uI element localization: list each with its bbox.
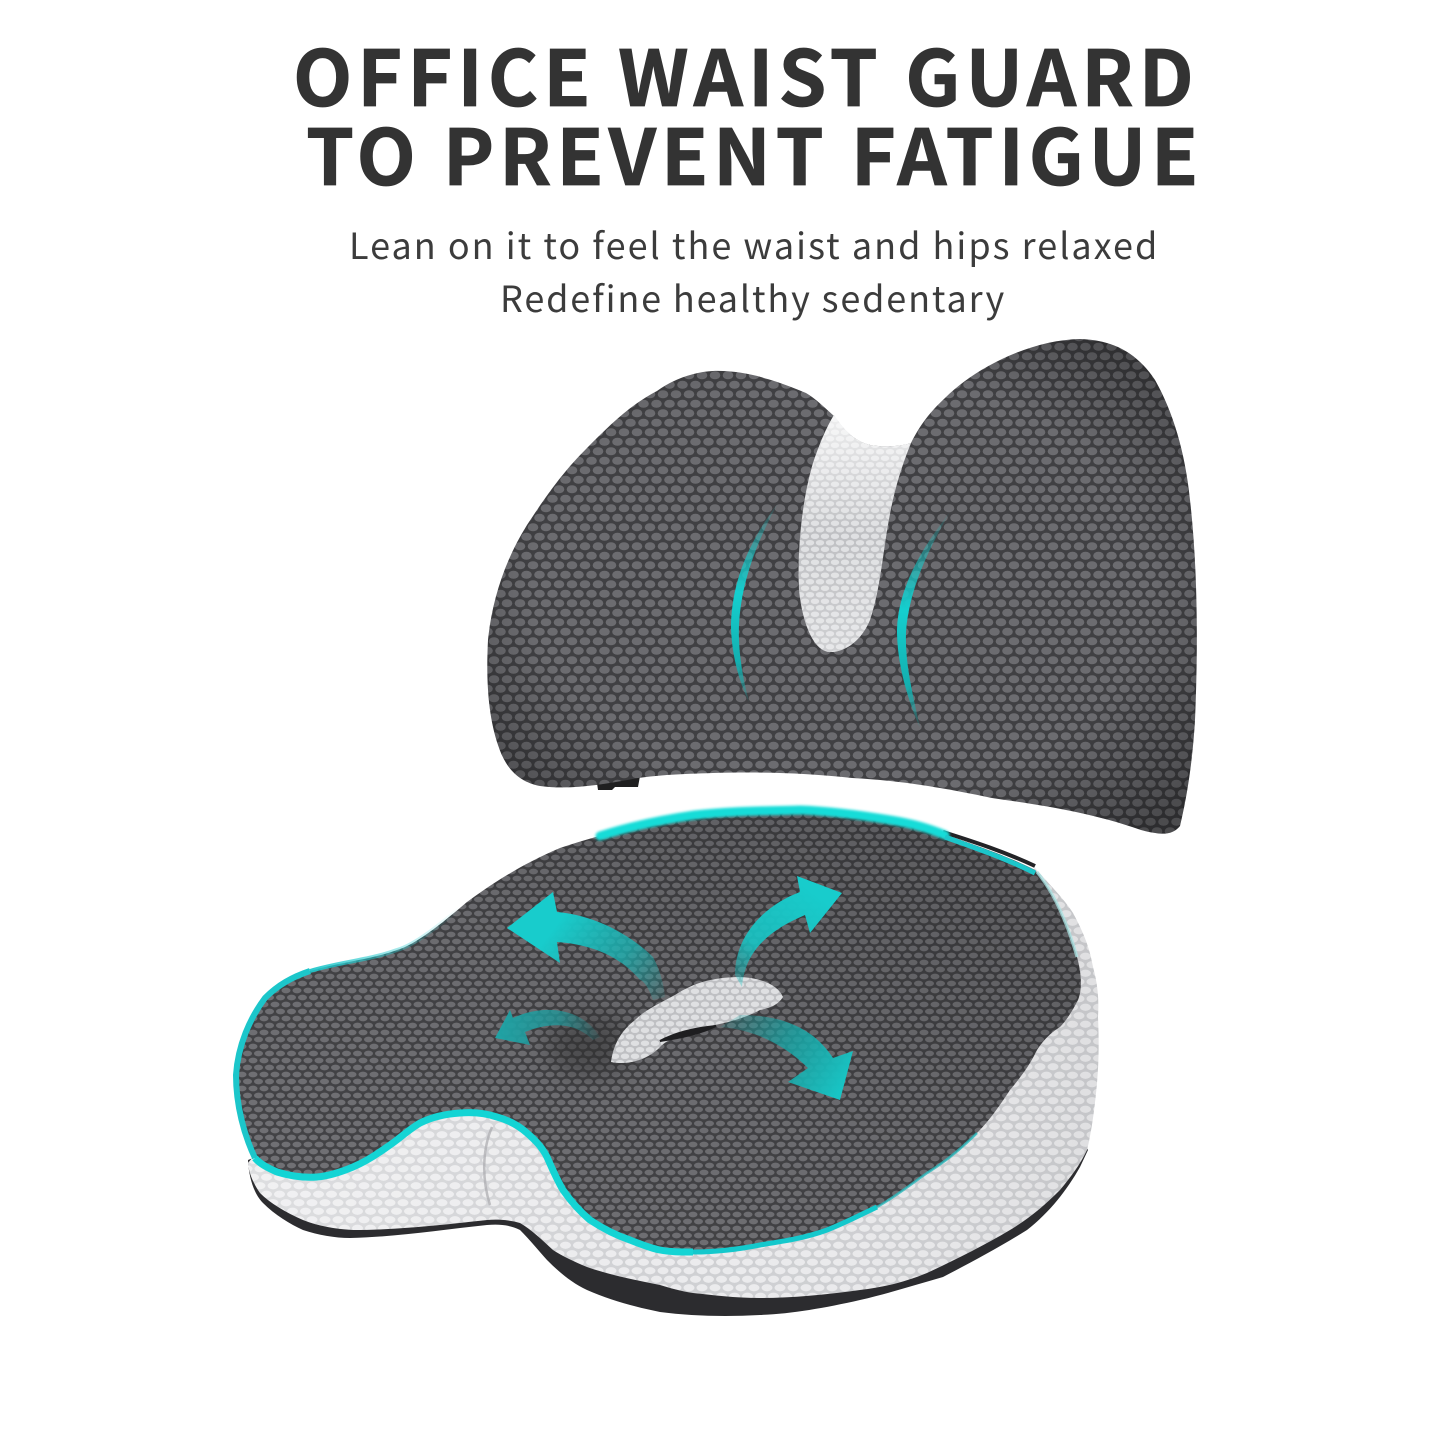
- seat hole depression shadow: [548, 1013, 632, 1077]
- title line 2: TO PREVENT FATIGUE: [306, 97, 1203, 208]
- lumbar centre channel: [799, 415, 911, 652]
- seat cushion: [236, 810, 1099, 1316]
- lumbar zipper pull: [596, 776, 640, 790]
- seat top surface: [236, 811, 1081, 1252]
- seat rear teal trim: [600, 810, 945, 836]
- arrow: upper right: [735, 876, 842, 987]
- lumbar cushion shading: [487, 339, 1197, 834]
- lumbar left teal curve: [731, 503, 778, 702]
- seat front seam: [484, 1127, 492, 1205]
- seat base zipper band: [248, 1000, 1088, 1316]
- lumbar cushion body: [487, 339, 1197, 834]
- arrow: lower right: [720, 1015, 853, 1100]
- title: [293, 18, 1203, 208]
- subtitle line 2: Redefine healthy sedentary: [500, 271, 1006, 323]
- seat white side wall: [248, 868, 1099, 1298]
- seat rear strap: [943, 832, 1035, 866]
- seat upper left fading trim: [310, 902, 467, 971]
- seat right thin teal trim: [877, 1133, 977, 1207]
- lumbar back cushion: [487, 339, 1197, 834]
- seat right edge trim: [1037, 872, 1077, 957]
- arrow: lower left: [495, 1010, 600, 1045]
- seat centre hole: [611, 977, 783, 1063]
- title line 1: OFFICE WAIST GUARD: [293, 18, 1199, 129]
- seat hole inner slit: [660, 1026, 716, 1041]
- seat left teal trim: [236, 971, 310, 1158]
- subtitle line 1: Lean on it to feel the waist and hips relaxed: [349, 218, 1159, 270]
- subtitle: [349, 218, 1159, 323]
- lumbar right teal curve: [897, 512, 950, 728]
- seat front teal trim: [255, 1113, 693, 1252]
- arrow: upper left: [507, 892, 665, 1000]
- seat surface shading: [236, 811, 1081, 1252]
- seat front right teal trim: [693, 1207, 877, 1252]
- seat rear right teal trim: [945, 837, 1035, 873]
